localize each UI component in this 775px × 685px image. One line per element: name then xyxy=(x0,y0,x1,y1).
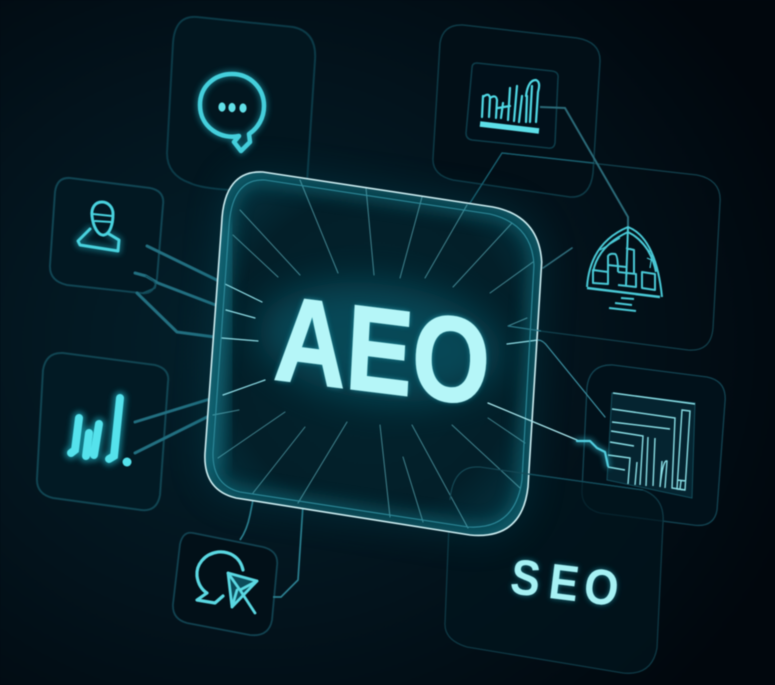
icon: person xyxy=(78,202,119,251)
icon: chat bubble xyxy=(200,74,264,151)
AEO heading: AEO xyxy=(272,271,493,431)
outer outline xyxy=(205,172,542,535)
radial rays: bright xyxy=(222,284,538,395)
panel: wide dome card xyxy=(430,107,720,350)
inner outline xyxy=(213,180,534,527)
icon: dome chart xyxy=(587,227,662,311)
inner chart tile xyxy=(466,63,558,148)
AEO heading: AEO xyxy=(272,271,493,431)
connectors: right links xyxy=(488,248,608,466)
icon: line bars xyxy=(480,80,539,131)
SEO card outline seen through main card xyxy=(450,467,528,500)
SEO card edge crossing right card xyxy=(528,474,643,490)
icon: stepped bars xyxy=(607,393,695,498)
left edge band xyxy=(210,220,226,470)
SEO label: SEO xyxy=(508,548,622,617)
SEO label: SEO xyxy=(508,548,622,617)
icon: bars xyxy=(71,398,132,466)
panel: SEO card xyxy=(445,467,663,673)
icon: cursor xyxy=(197,552,257,613)
glow behind main card xyxy=(205,172,542,535)
panel: top right chart card xyxy=(433,25,600,197)
connector: chart to dome xyxy=(540,107,628,227)
halo behind AEO xyxy=(252,270,508,414)
panel: chat card xyxy=(167,17,315,200)
panel: right bars card xyxy=(582,365,725,525)
wide card edge seen through main card xyxy=(508,326,541,331)
panel: main AEO card xyxy=(205,172,542,535)
radial rays xyxy=(213,180,533,528)
panel: person card xyxy=(50,178,163,293)
panel: bars card xyxy=(37,353,168,510)
inner edge glow xyxy=(205,172,542,535)
connectors: bottom links xyxy=(240,490,304,597)
connectors: left links xyxy=(135,246,227,453)
panel: cursor card xyxy=(173,533,277,635)
